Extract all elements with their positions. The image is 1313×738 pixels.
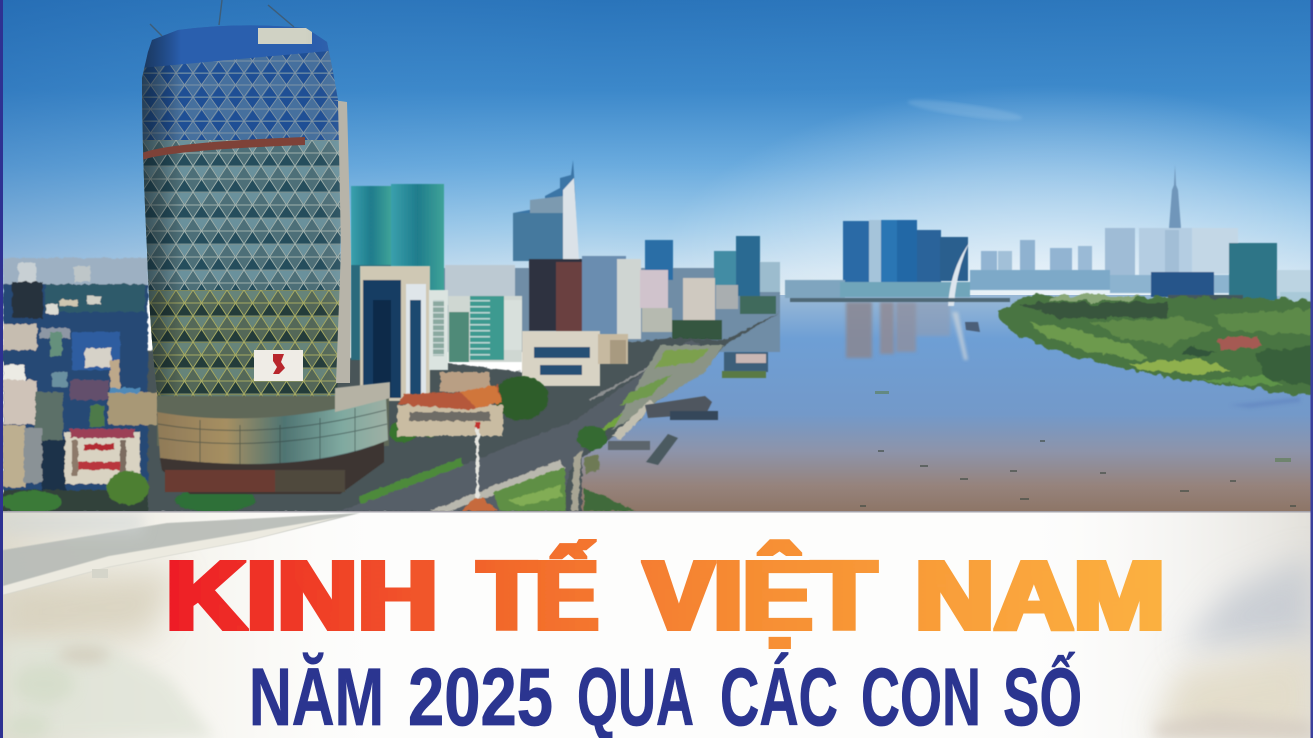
landmark tower — [1169, 165, 1181, 228]
red-roof building — [65, 432, 140, 484]
ground base of the city and road — [3, 312, 780, 512]
concrete core — [333, 100, 351, 383]
title: KINH TẾ VIỆT NAM: NAM — [915, 540, 1165, 652]
faded riverbank and bridge — [3, 512, 1313, 738]
mid-city buildings along left river bank — [440, 160, 780, 362]
left city blocks — [2, 258, 158, 513]
trees — [494, 376, 548, 420]
old red-roof hall — [397, 405, 503, 436]
company sign — [254, 350, 303, 381]
teal twin towers — [351, 184, 444, 360]
riverside park and promenade — [493, 345, 724, 511]
title: KINH TẾ VIỆT NAM: KINH — [166, 540, 438, 652]
boats and piers — [608, 322, 980, 465]
right blue border — [1310, 0, 1313, 738]
title: KINH TẾ VIỆT NAM: TẾ — [478, 540, 598, 652]
title: KINH TẾ VIỆT NAM: VIỆT — [644, 540, 876, 652]
photo: city skyline and river — [0, 0, 1313, 513]
red tinted block — [529, 259, 585, 331]
Bitexco tower — [513, 160, 578, 260]
river — [570, 295, 1313, 512]
left blue border — [0, 0, 3, 738]
title: KINH TẾ VIỆT NAM — [166, 540, 1165, 652]
flag pole — [476, 424, 479, 500]
cable bridge pylon — [948, 243, 969, 306]
low white building — [522, 331, 628, 386]
dark blue office tower — [360, 266, 448, 401]
trees and old hall — [175, 372, 607, 512]
subtitle: NĂM 2025 QUA CÁC CON SỐ — [249, 652, 1082, 738]
dark new towers — [1229, 243, 1277, 301]
right bank with greenery — [997, 295, 1313, 396]
main round tower — [140, 0, 351, 415]
tower facade lattice — [140, 20, 345, 415]
city base block — [440, 268, 780, 352]
sky — [0, 0, 1313, 300]
white mid tower — [448, 296, 522, 362]
cranes on rooftop — [150, 0, 294, 36]
tower podium — [157, 382, 390, 494]
white title panel with faded photo — [0, 511, 1313, 738]
distant skyline right — [785, 165, 1313, 319]
twin towers cluster — [843, 221, 869, 286]
